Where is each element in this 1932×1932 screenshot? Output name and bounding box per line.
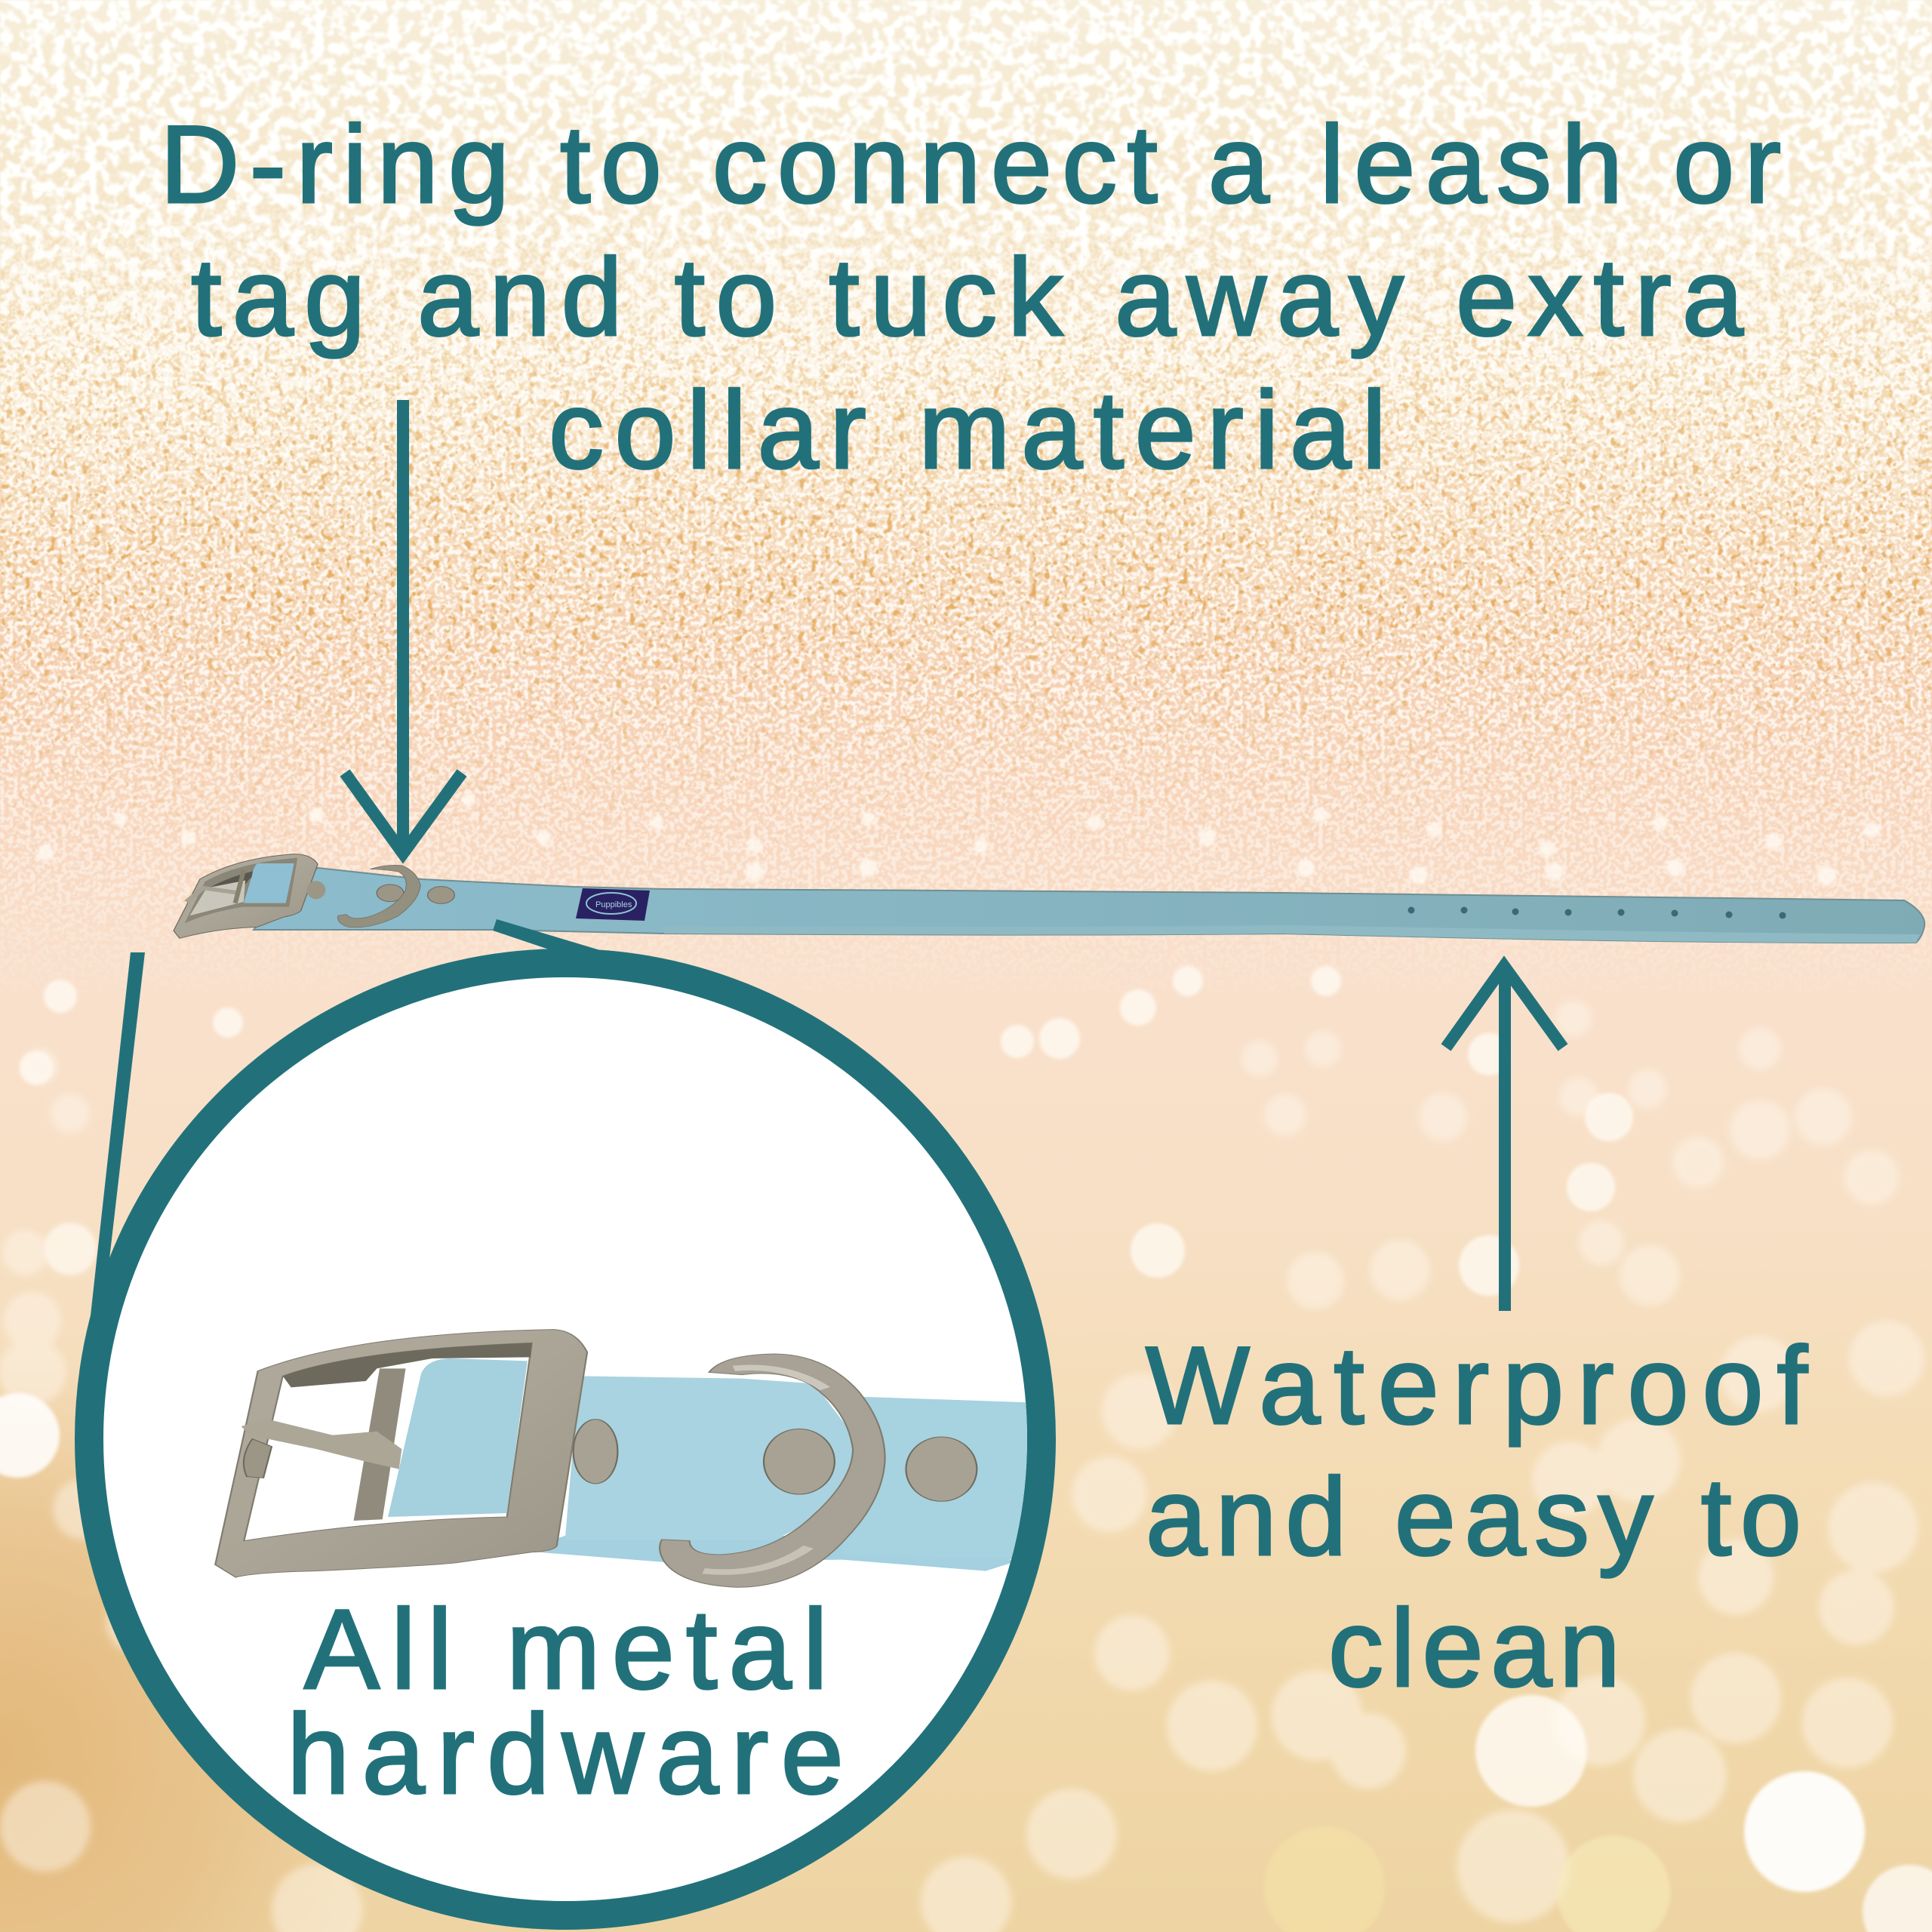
collar photo: full strap: [174, 854, 1924, 943]
title: D-ring caption: D-ring to connect a leash or: [160, 103, 1781, 226]
waterproof caption: Waterproof: [1146, 1324, 1807, 1447]
lower strap layer: [537, 1535, 1011, 1571]
holes: [1408, 907, 1786, 919]
buckle inner shadow: [283, 1343, 532, 1387]
buckle frame: [215, 1330, 587, 1577]
buckle hinge: [244, 1439, 272, 1478]
waterproof caption: clean: [1328, 1586, 1620, 1709]
collar close-up: [215, 1330, 1030, 1587]
arrow: down to D-ring: [345, 400, 462, 854]
callout lines to zoom circle: [91, 919, 608, 1315]
waterproof caption: [1146, 1324, 1807, 1709]
buckle post: [354, 1368, 405, 1521]
main strap: [565, 1376, 864, 1540]
small buckle and hardware: [174, 854, 454, 938]
title: D-ring caption: [160, 103, 1781, 491]
d-ring: [660, 1354, 885, 1587]
label tag: [576, 888, 650, 921]
title: D-ring caption: collar material: [549, 368, 1386, 491]
strap lower lip: [664, 925, 1920, 943]
right strap: [841, 1397, 1030, 1560]
zoom circle panel: [89, 963, 1041, 1915]
close-up caption: [287, 1586, 844, 1817]
buckle tongue: [242, 1419, 401, 1469]
rivets: [574, 1420, 617, 1484]
waterproof caption: and easy to: [1146, 1455, 1801, 1578]
strap: [254, 868, 1924, 943]
close-up caption: hardware: [287, 1690, 844, 1817]
arrow: up to strap: [1446, 966, 1563, 1311]
close-up caption: All metal: [304, 1586, 828, 1712]
title: D-ring caption: tag and to tuck away extra: [191, 235, 1744, 358]
label tag: Puppibles: [595, 900, 632, 909]
roller: [388, 1358, 528, 1517]
